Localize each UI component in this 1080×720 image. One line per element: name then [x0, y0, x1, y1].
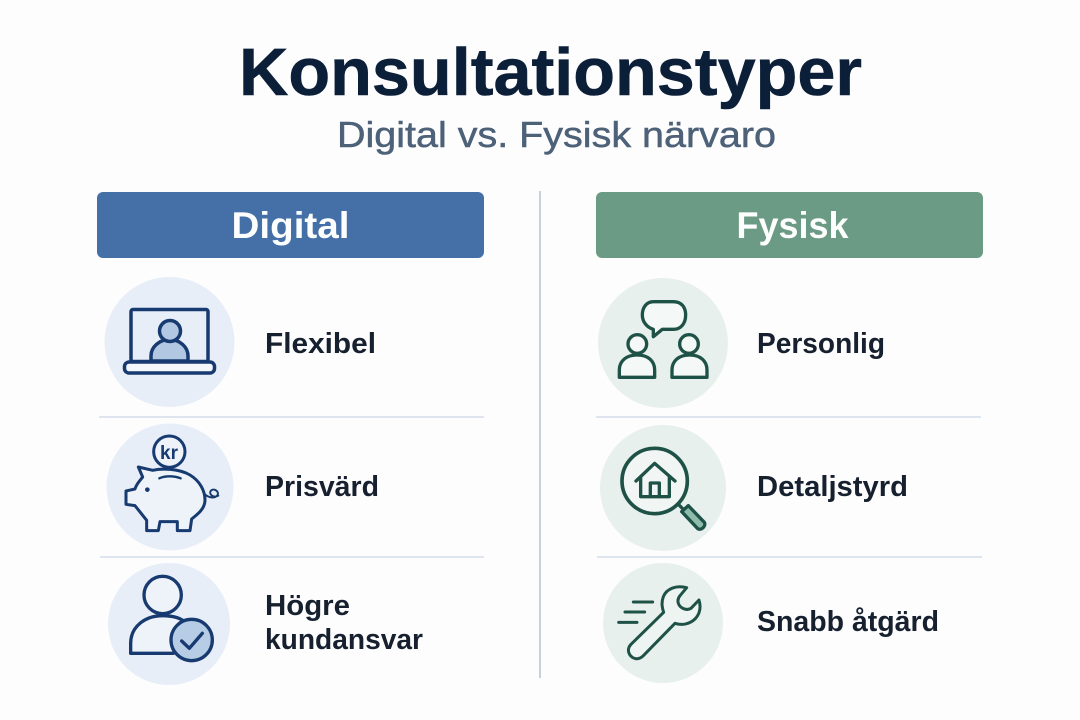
heading: fysisk: Fysisk	[736, 205, 849, 246]
label: Personlig: Personlig	[757, 328, 885, 360]
panel: fysisk	[596, 192, 983, 683]
icon: laptop with person	[104, 277, 234, 407]
icon: piggy bank: kr	[160, 443, 179, 464]
icon: magnifier with house	[600, 425, 726, 551]
heading: digital: Digital	[232, 205, 350, 246]
heading: digital	[97, 192, 484, 258]
label: Högre kundansvar: kundansvar	[265, 624, 423, 656]
label: Snabb åtgärd: Snabb åtgärd	[757, 606, 939, 638]
label: Prisvärd: Prisvärd	[265, 471, 379, 503]
icon: person with checkmark	[108, 563, 230, 685]
label: Detaljstyrd: Detaljstyrd	[757, 471, 908, 503]
icon: piggy bank	[106, 424, 234, 550]
heading: fysisk	[596, 192, 983, 258]
label: Högre kundansvar: Högre	[265, 590, 350, 622]
title: Konsultationstyper	[239, 35, 862, 110]
icon: wrench with speed lines	[603, 563, 723, 683]
subtitle: Digital vs. Fysisk närvaro	[337, 114, 776, 155]
panel: digital	[97, 192, 484, 685]
label: Flexibel: Flexibel	[265, 328, 376, 360]
icon: two people talking	[598, 278, 728, 408]
